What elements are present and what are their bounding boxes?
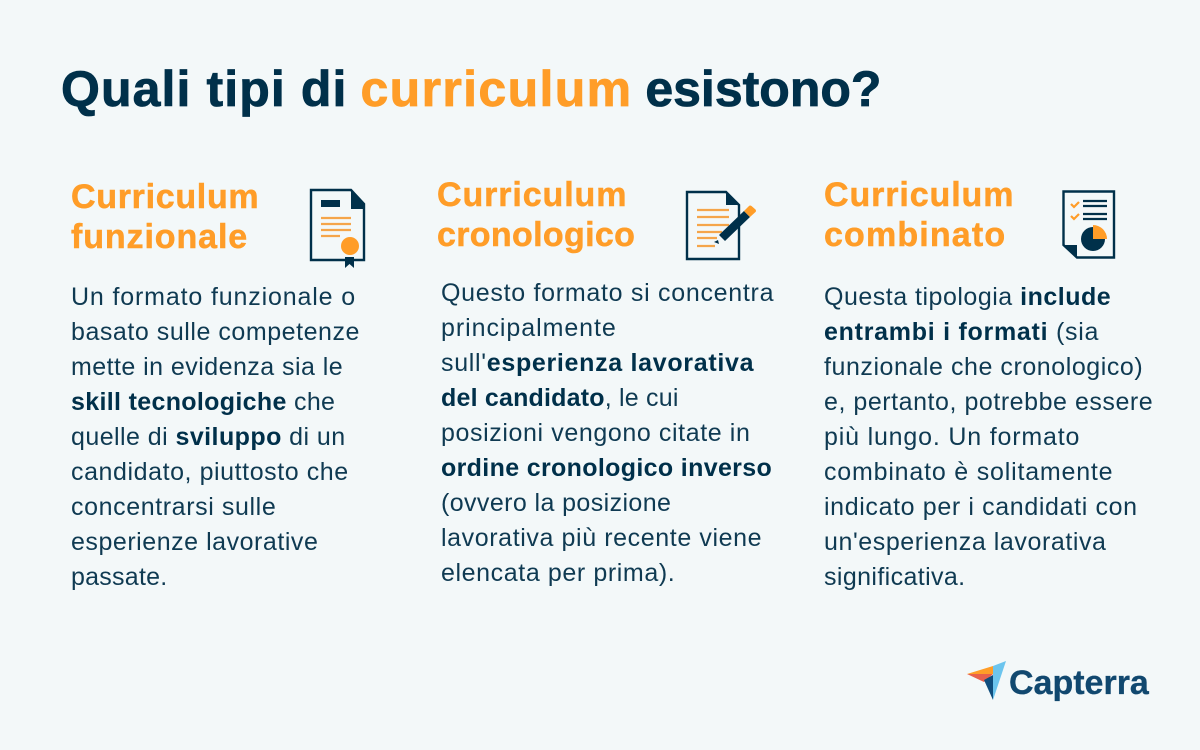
body text: curriculum funzionale: skill tecnologiche che [71, 388, 335, 416]
body text: curriculum cronologico: del candidato, le cui [441, 384, 679, 412]
body text: curriculum funzionale: concentrarsi sulle [71, 493, 276, 521]
icon: certificate document [310, 188, 366, 268]
body text: curriculum cronologico: elencata per prima). [441, 559, 675, 587]
body text: curriculum funzionale: esperienze lavorative [71, 528, 318, 556]
heading: curriculum cronologico [437, 176, 635, 254]
heading: curriculum funzionale: funzionale [71, 218, 248, 256]
body text: curriculum funzionale [71, 283, 360, 591]
heading: curriculum funzionale [71, 178, 259, 256]
body text: curriculum cronologico: sull'esperienza lavorativa [441, 349, 754, 377]
icon: Capterra arrow [967, 661, 1006, 700]
heading: curriculum cronologico: cronologico [437, 216, 635, 254]
body text: curriculum funzionale: mette in evidenza sia le [71, 353, 343, 381]
body text: curriculum funzionale: candidato, piuttosto che [71, 458, 349, 486]
logo: Capterra [967, 661, 1150, 702]
heading: curriculum funzionale: Curriculum [71, 178, 259, 216]
body text: curriculum cronologico: ordine cronologico inverso [441, 454, 772, 482]
panel: curriculum cronologico [437, 176, 774, 587]
icon: document with checklist and pie chart [1062, 190, 1116, 259]
heading: curriculum combinato [824, 176, 1014, 254]
body text: curriculum combinato: combinato è solitamente [824, 458, 1113, 486]
panel: curriculum combinato [824, 176, 1153, 591]
body text: curriculum cronologico: Questo formato si concentra [441, 279, 774, 307]
panel: curriculum funzionale [71, 178, 366, 591]
body text: curriculum combinato [824, 283, 1153, 591]
body text: curriculum funzionale: Un formato funzionale o [71, 283, 356, 311]
body text: curriculum funzionale: basato sulle competenze [71, 318, 360, 346]
body text: curriculum combinato: significativa. [824, 563, 966, 591]
body text: curriculum cronologico: lavorativa più recente viene [441, 524, 762, 552]
logo wordmark: Capterra [1009, 664, 1149, 702]
body text: curriculum cronologico: posizioni vengono citate in [441, 419, 750, 447]
heading: curriculum combinato: combinato [824, 216, 1006, 254]
title: Quali tipi di curriculum esistono? [61, 61, 881, 117]
body text: curriculum combinato: funzionale che cronologico) [824, 353, 1143, 381]
heading: curriculum combinato: Curriculum [824, 176, 1014, 214]
heading: curriculum cronologico: Curriculum [437, 176, 627, 214]
body text: curriculum funzionale: passate. [71, 563, 168, 591]
body text: curriculum combinato: entrambi i formati (sia [824, 318, 1099, 346]
body text: curriculum combinato: indicato per i candidati con [824, 493, 1138, 521]
body text: curriculum combinato: più lungo. Un formato [824, 423, 1080, 451]
icon: document with pencil [686, 190, 756, 260]
body text: curriculum funzionale: quelle di sviluppo di un [71, 423, 346, 451]
body text: curriculum combinato: un'esperienza lavorativa [824, 528, 1107, 556]
body text: curriculum combinato: Questa tipologia include [824, 283, 1111, 311]
body text: curriculum cronologico [441, 279, 774, 587]
body text: curriculum cronologico: (ovvero la posizione [441, 489, 671, 517]
body text: curriculum combinato: e, pertanto, potrebbe essere [824, 388, 1153, 416]
body text: curriculum cronologico: principalmente [441, 314, 617, 342]
